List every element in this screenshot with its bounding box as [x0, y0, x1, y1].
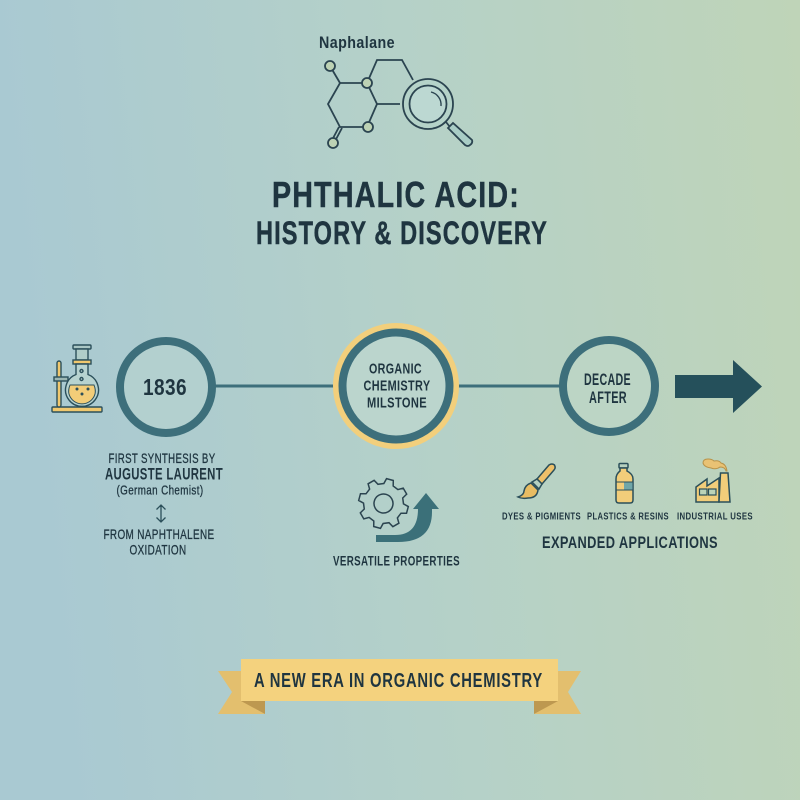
label: versatile properties: VERSATILE PROPERTIES — [333, 554, 460, 568]
application labels: PLASTICS & RESINS — [587, 510, 669, 522]
application labels — [502, 510, 753, 522]
title: HISTORY & DISCOVERY — [256, 215, 548, 251]
milestone: organic chemistry milestone — [336, 326, 456, 446]
text block: from naphthalene oxidation: FROM NAPHTHALENE — [104, 526, 214, 542]
milestone: 1836 — [120, 341, 212, 433]
arrow: timeline continues — [675, 360, 762, 413]
application labels: DYES & PIGMIENTS — [502, 510, 581, 522]
milestone: decade after — [563, 340, 655, 432]
icon: plastic bottle — [616, 464, 633, 503]
text block: first synthesis: FIRST SYNTHESIS BY — [108, 450, 216, 466]
text block: from naphthalene oxidation: OXIDATION — [130, 542, 186, 558]
text block: first synthesis: AUGUSTE LAURENT — [105, 464, 223, 484]
milestone: organic chemistry milestone: CHEMISTRY — [364, 378, 430, 394]
icon: factory with smoke — [696, 459, 730, 502]
application labels: INDUSTRIAL USES — [677, 510, 753, 522]
icon: paintbrush — [518, 464, 555, 498]
molecule label: Naphalane — [319, 33, 395, 52]
milestone: decade after: AFTER — [589, 389, 627, 407]
title: PHTHALIC ACID: — [272, 174, 520, 215]
banner: a new era in organic chemistry: A NEW ERA IN ORGANIC CHEMISTRY — [254, 670, 543, 692]
icon: flask on stand — [52, 345, 102, 412]
icon: naphthalene molecule with magnifier — [325, 60, 472, 148]
milestone: organic chemistry milestone: MILSTONE — [367, 394, 427, 412]
milestone: decade after: DECADE — [584, 371, 631, 389]
banner: a new era in organic chemistry — [218, 659, 581, 714]
icon: gear — [353, 473, 414, 534]
text block: first synthesis — [105, 450, 223, 498]
timeline connector lines — [214, 384, 562, 388]
icon: rising arrow — [376, 493, 439, 542]
milestone: 1836: 1836 — [143, 374, 187, 400]
icon: double-headed arrow — [156, 505, 166, 522]
title — [256, 174, 548, 251]
text block: from naphthalene oxidation — [104, 526, 214, 558]
milestone: organic chemistry milestone: ORGANIC — [369, 360, 422, 378]
heading: expanded applications: EXPANDED APPLICATIONS — [542, 533, 718, 552]
text block: first synthesis: (German Chemist) — [116, 482, 204, 498]
